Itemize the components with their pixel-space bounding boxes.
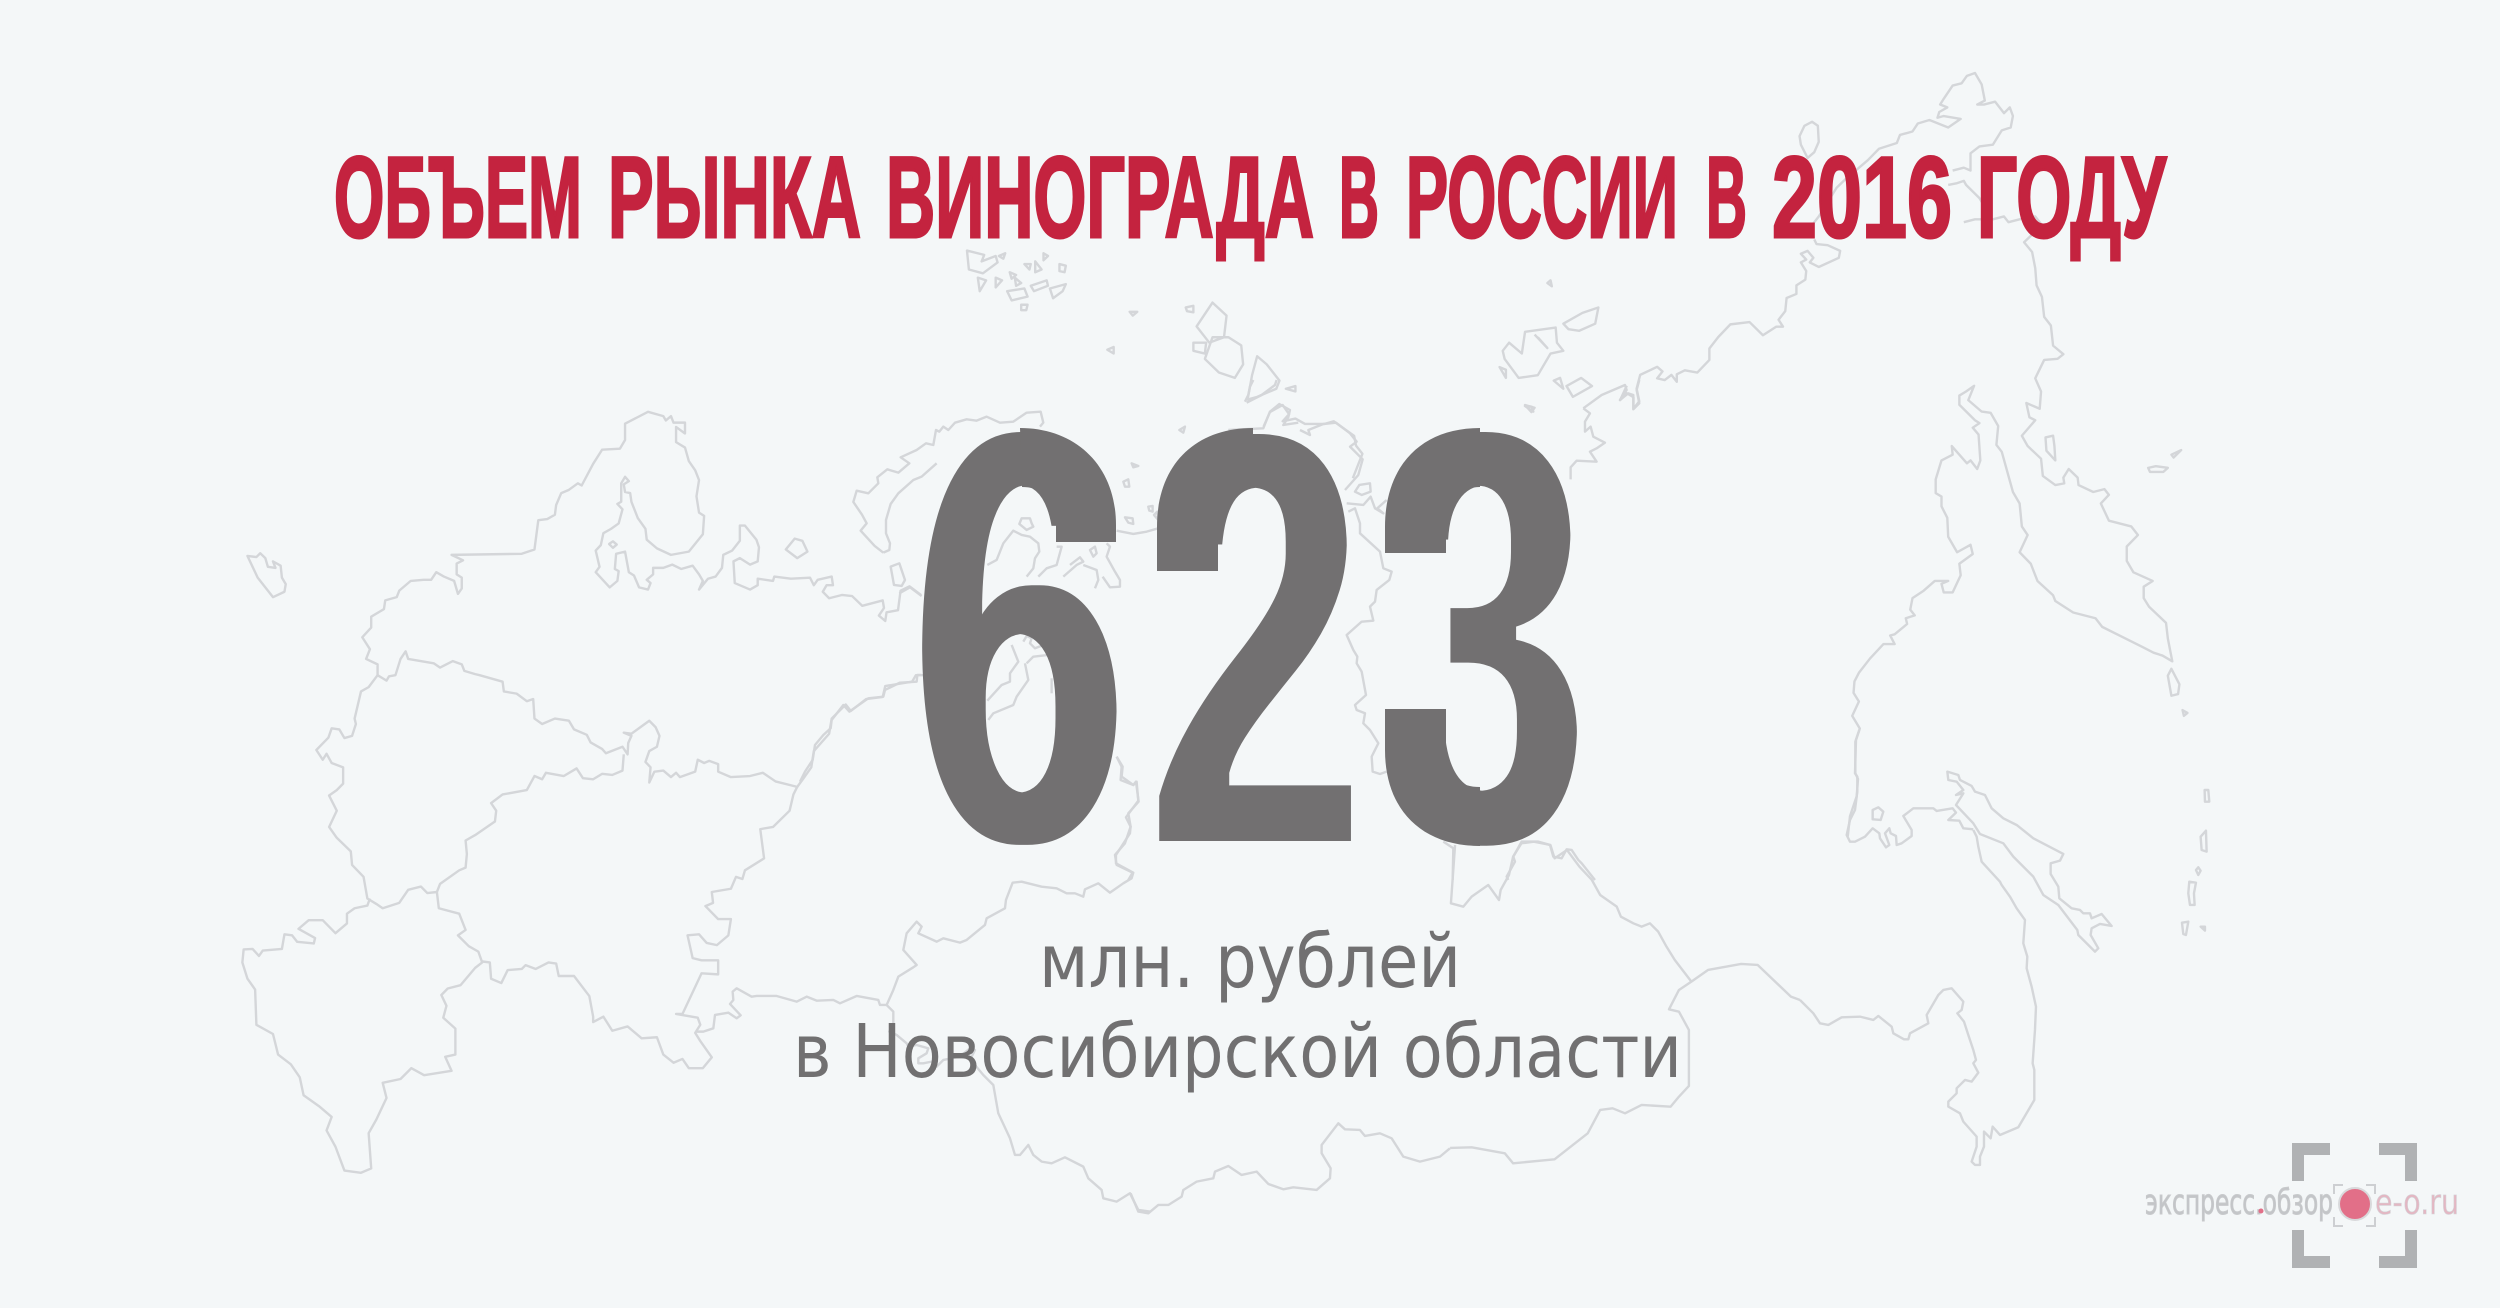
big number 623: 6 xyxy=(912,301,1127,972)
title: ВИНОГРАДА xyxy=(886,134,1314,262)
logo red circle xyxy=(2339,1188,2371,1220)
title xyxy=(334,134,2167,262)
title: РЫНКА xyxy=(608,134,861,262)
logo dot xyxy=(2258,1208,2264,1214)
logo small corner brackets xyxy=(2334,1185,2375,1226)
big number 623 xyxy=(912,301,1586,975)
title: ОБЪЕМ xyxy=(334,134,582,262)
title: ГОДУ xyxy=(1977,134,2167,262)
subtitle: unit and region xyxy=(793,919,1682,1095)
title: В xyxy=(1706,134,1747,262)
big number 623: 2 xyxy=(1150,304,1362,975)
subtitle: unit and region: млн. рублей xyxy=(1039,919,1461,1005)
logo text domain: e-o.ru xyxy=(2375,1183,2459,1223)
title: РОССИИ xyxy=(1406,134,1678,262)
logo text russian: экспресс.обзор xyxy=(2145,1183,2333,1223)
background map of Russia outline xyxy=(242,73,2209,1213)
big number 623: 3 xyxy=(1380,302,1586,973)
title: 2016 xyxy=(1772,134,1952,262)
title: В xyxy=(1339,134,1379,262)
logo: express review watermark xyxy=(2145,1149,2459,1262)
subtitle: unit and region: в Новосибирской области xyxy=(793,1009,1682,1095)
logo big corner brackets xyxy=(2298,1149,2411,1262)
